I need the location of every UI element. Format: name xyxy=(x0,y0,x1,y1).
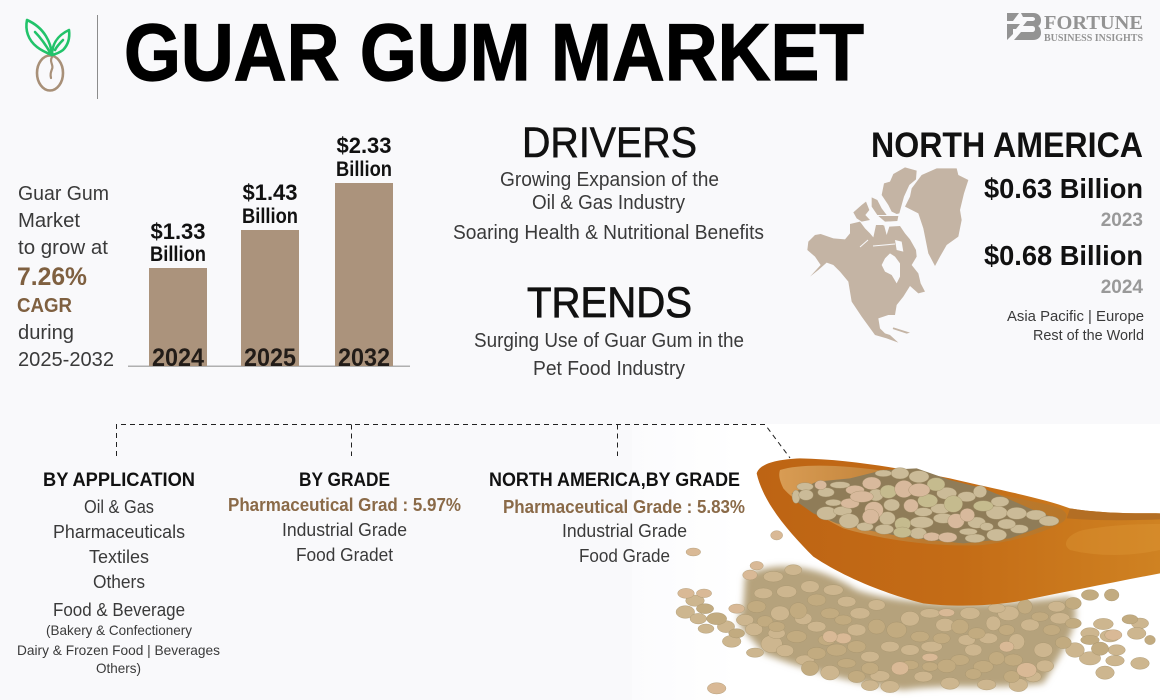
panel: by application: Textiles xyxy=(89,547,149,567)
panel: north america: Rest of the World xyxy=(1033,327,1144,344)
bar: 2032: 2032 xyxy=(338,344,390,372)
panel: by application: Dairy & Frozen Food | Beverages xyxy=(17,642,220,658)
bar: 2024: Billion xyxy=(150,243,206,266)
panel: north america xyxy=(807,126,1144,344)
map: north america xyxy=(807,167,968,343)
bar: 2025: $1.43 xyxy=(242,180,298,205)
panel: by grade: Pharmaceutical Grad : 5.97% xyxy=(228,495,461,515)
scattered seeds xyxy=(676,531,1155,694)
title: GUAR GUM MARKET xyxy=(124,8,864,98)
bar: 2024 xyxy=(149,219,207,372)
panel: north america by grade: Food Grade xyxy=(579,546,670,566)
panel: by application: BY APPLICATION xyxy=(43,470,195,491)
CAGR text block xyxy=(17,183,114,371)
panel: by grade: Industrial Grade xyxy=(282,520,407,540)
scattered seeds base xyxy=(739,566,1076,690)
panel: north america: $0.68 Billion xyxy=(984,240,1143,271)
bar: 2025 xyxy=(241,180,299,372)
panel: by application: Food & Beverage xyxy=(53,600,185,620)
bar: 2024: 2024 xyxy=(152,344,204,372)
bar: 2024: $1.33 xyxy=(150,219,206,244)
logo: Fortune Business Insights: FORTUNE xyxy=(1044,12,1143,34)
logo: Fortune Business Insights xyxy=(1007,12,1143,44)
panel: drivers: Soaring Health & Nutritional Benefits xyxy=(453,222,764,244)
panel: north america by grade: Pharmaceutical Grade : 5.83% xyxy=(503,497,745,517)
panel: by grade: BY GRADE xyxy=(299,470,390,491)
panel: trends xyxy=(474,279,744,380)
bar: 2032 xyxy=(335,133,393,372)
panel: north america by grade xyxy=(489,470,745,566)
panel: by application: Others xyxy=(93,572,145,592)
panel: north america: 2024 xyxy=(1101,277,1143,298)
panel: trends: TRENDS xyxy=(527,279,692,327)
CAGR text block: during xyxy=(18,322,74,344)
panel: drivers xyxy=(453,119,764,244)
panel: trends: Surging Use of Guar Gum in the xyxy=(474,330,744,352)
panel: by application: Oil & Gas xyxy=(84,497,154,517)
arctic channels xyxy=(860,222,900,247)
panel: drivers: DRIVERS xyxy=(522,119,697,167)
bar: 2025: Billion xyxy=(242,205,298,228)
CAGR text block: Guar Gum xyxy=(18,183,109,205)
panel: by application: Others) xyxy=(96,660,141,676)
seed heap xyxy=(792,468,1060,543)
panel: trends: Pet Food Industry xyxy=(533,358,685,380)
CAGR text block: 7.26% xyxy=(17,263,87,291)
panel: by grade: Food Gradet xyxy=(296,545,393,565)
panel: north america by grade: Industrial Grade xyxy=(562,521,687,541)
panel: north america: Asia Pacific | Europe xyxy=(1007,308,1144,325)
panel: by grade xyxy=(228,470,461,565)
panel: by application: Pharmaceuticals xyxy=(53,522,185,542)
panel: by application xyxy=(17,470,220,676)
panel: north america: $0.63 Billion xyxy=(984,173,1143,204)
CAGR text block: to grow at xyxy=(18,237,108,259)
panel: north america by grade: NORTH AMERICA,BY GRADE xyxy=(489,470,740,491)
logo: Fortune Business Insights: BUSINESS INSIGHTS xyxy=(1044,32,1143,44)
photo: wooden spoon with guar seeds xyxy=(632,424,1160,700)
CAGR text block: CAGR xyxy=(17,295,73,317)
panel: by application: (Bakery & Confectionery xyxy=(46,622,192,638)
bar: 2025: 2025 xyxy=(244,344,296,372)
CAGR text block: Market xyxy=(18,210,80,232)
bar: 2032: $2.33 xyxy=(336,133,392,158)
panel: north america: NORTH AMERICA xyxy=(871,126,1143,165)
bar chart xyxy=(128,133,410,372)
panel: drivers: Growing Expansion of the xyxy=(500,169,719,191)
CAGR text block: 2025-2032 xyxy=(18,349,114,371)
bar: 2032: Billion xyxy=(336,158,392,181)
panel: north america: 2023 xyxy=(1101,210,1143,231)
dashed connector lines xyxy=(116,424,790,458)
panel: drivers: Oil & Gas Industry xyxy=(532,192,685,214)
icon: sprouting seed xyxy=(26,20,69,90)
wooden spoon xyxy=(757,458,1160,606)
inner bowl xyxy=(779,466,1067,545)
